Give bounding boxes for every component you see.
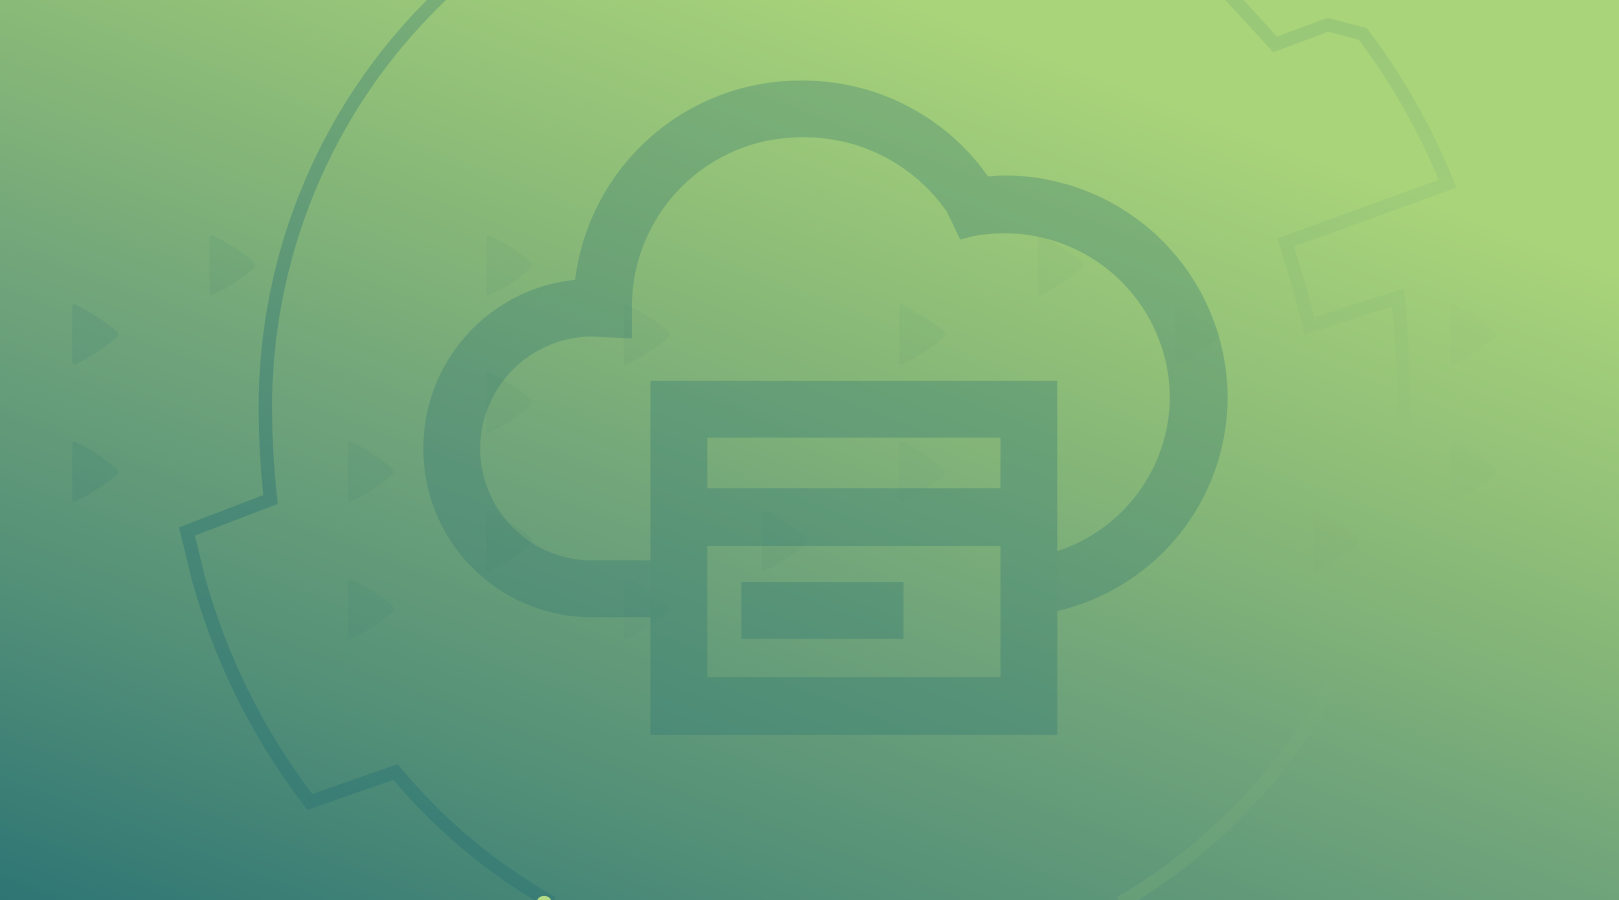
icon: server window [650,381,1057,735]
gear outline [187,0,1448,900]
triangle pattern [72,235,1497,639]
small light dot [537,896,551,900]
window frame [650,381,1057,735]
icon: cloud [423,80,1228,617]
window bar [741,582,903,639]
